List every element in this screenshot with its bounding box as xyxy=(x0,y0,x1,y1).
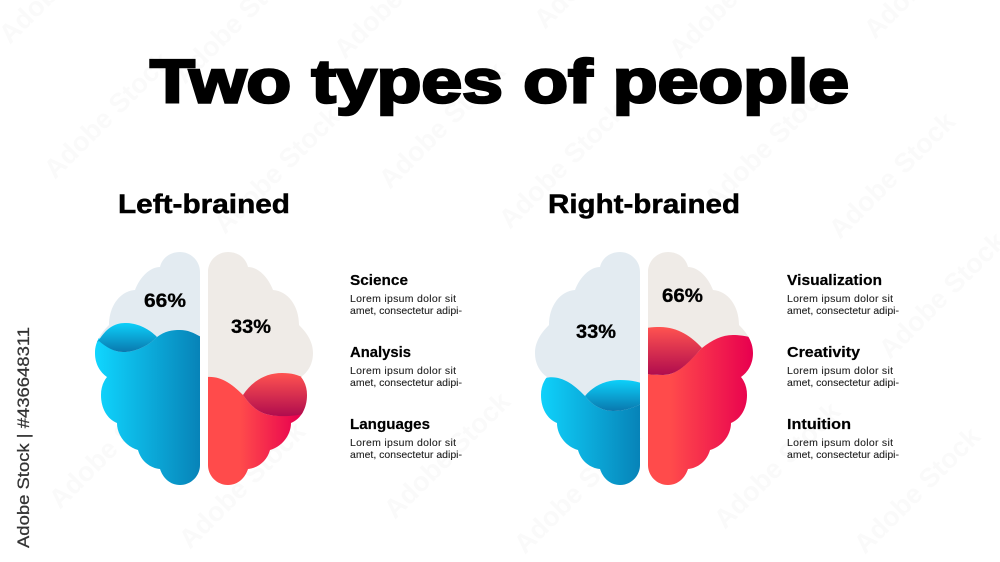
item: science: Science xyxy=(350,272,408,289)
item: intuition: amet, consectetur adipi- xyxy=(787,449,900,461)
watermark pattern: Adobe Stock xyxy=(208,101,347,239)
item: creativity xyxy=(787,344,900,389)
item: languages xyxy=(350,416,462,461)
watermark pattern: Adobe Stock xyxy=(708,396,847,534)
item: languages: amet, consectetur adipi- xyxy=(350,449,462,461)
label: 33%: 33% xyxy=(576,322,616,343)
watermark pattern: Adobe Stock xyxy=(823,106,962,244)
watermark pattern: Adobe Stock xyxy=(43,376,182,514)
list: right-brained topics xyxy=(787,272,900,461)
item: visualization: amet, consectetur adipi- xyxy=(787,305,900,317)
watermark pattern: Adobe Stock xyxy=(173,416,312,554)
item: analysis: amet, consectetur adipi- xyxy=(350,377,462,389)
item: creativity: amet, consectetur adipi- xyxy=(787,377,900,389)
heading: right-brained: Right-brained xyxy=(548,189,740,219)
item: intuition: Intuition xyxy=(787,416,851,433)
item: science: amet, consectetur adipi- xyxy=(350,305,462,317)
watermark pattern: Adobe Stock xyxy=(378,386,517,524)
item: visualization: Lorem ipsum dolor sit xyxy=(787,293,893,305)
list: left-brained topics xyxy=(350,272,462,461)
item: visualization xyxy=(787,272,900,317)
left hemisphere 33% xyxy=(530,250,642,490)
label: 33%: 33% xyxy=(231,317,271,338)
right hemisphere 33% xyxy=(206,250,318,490)
panel: left-brained xyxy=(90,189,462,490)
item: intuition: Lorem ipsum dolor sit xyxy=(787,437,893,449)
watermark pattern: Adobe Stock xyxy=(698,76,837,214)
item: analysis: Lorem ipsum dolor sit xyxy=(350,365,456,377)
item: visualization: Visualization xyxy=(787,272,882,289)
right hemisphere 66% xyxy=(648,252,753,485)
stock credit: Adobe Stock | #436648311 xyxy=(14,327,33,548)
watermark pattern: Adobe Stock xyxy=(508,421,647,559)
brain chart: left-brained xyxy=(90,250,318,490)
watermark pattern: Adobe Stock xyxy=(493,96,632,234)
item: creativity: Lorem ipsum dolor sit xyxy=(787,365,893,377)
item: analysis xyxy=(350,344,462,389)
item: analysis: Analysis xyxy=(350,344,411,361)
watermark pattern: Adobe Stock xyxy=(848,421,987,559)
watermark pattern: Adobe Stock xyxy=(373,56,512,194)
item: creativity: Creativity xyxy=(787,344,861,361)
watermark pattern: Adobe Stock xyxy=(38,46,177,184)
item: science: Lorem ipsum dolor sit xyxy=(350,293,456,305)
item: languages: Lorem ipsum dolor sit xyxy=(350,437,456,449)
item: languages: Languages xyxy=(350,416,430,433)
item: science xyxy=(350,272,462,317)
left hemisphere 66% xyxy=(90,250,202,490)
heading: left-brained: Left-brained xyxy=(118,189,290,219)
item: intuition xyxy=(787,416,900,461)
brain chart: right-brained xyxy=(530,250,760,490)
label: 66%: 66% xyxy=(662,286,703,307)
title: Two types of people xyxy=(150,48,849,116)
label: 66%: 66% xyxy=(144,291,186,312)
panel: right-brained xyxy=(530,189,900,490)
